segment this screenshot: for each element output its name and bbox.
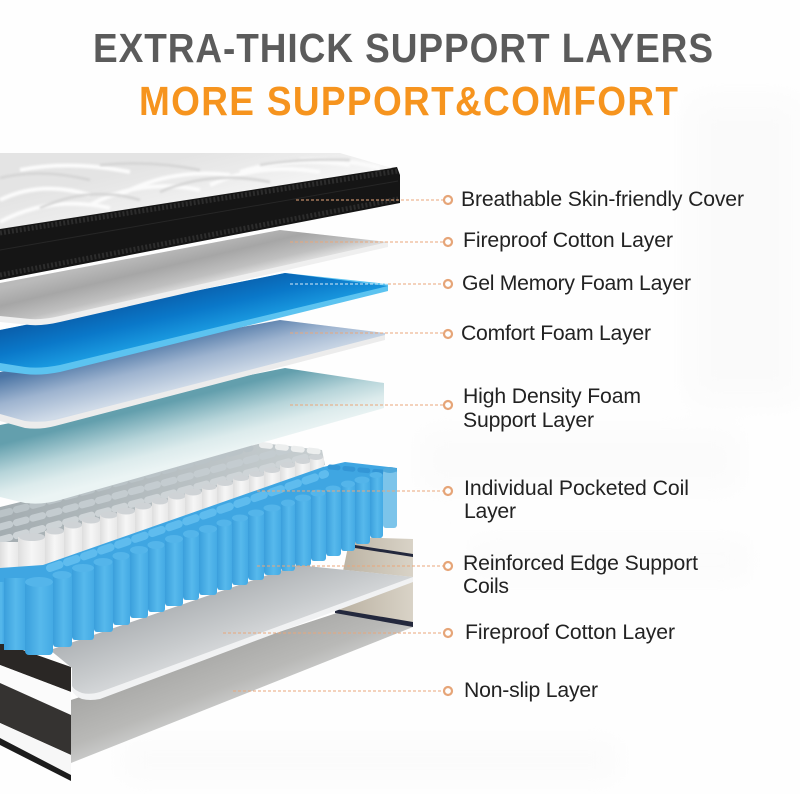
non-slip bottom layer [71,612,413,763]
label: high density foam support layer: Support Layer [463,409,594,432]
label: individual pocketed coil layer [257,477,689,523]
label: reinforced edge support coils: Coils [463,575,509,598]
white coil front row [0,454,324,577]
label: reinforced edge support coils [257,552,698,598]
gel memory foam layer [0,273,388,375]
label: non-slip layer [233,679,598,702]
label: comfort foam layer: Comfort Foam Layer [461,322,651,345]
label: comfort foam layer [290,322,651,345]
blue coil top band [0,462,397,600]
label: fireproof cotton layer upper [290,229,673,252]
label: breathable cover: Breathable Skin-friendly Cover [461,188,744,211]
label: fireproof cotton layer lower: Fireproof Cotton Layer [465,621,675,644]
fireproof cotton upper layer [0,230,388,325]
label: gel memory foam layer [290,272,691,295]
title: EXTRA-THICK SUPPORT LAYERS [93,26,713,71]
label: individual pocketed coil layer: Layer [464,500,516,523]
title: MORE SUPPORT&COMFORT [139,79,678,124]
label: breathable cover [296,188,744,211]
label: fireproof cotton layer lower [223,621,675,644]
comfort foam layer [0,320,385,429]
label: high density foam support layer: High Density Foam [463,385,641,408]
coil back rows [0,443,325,556]
side fabric right [335,537,413,627]
side stripes left [0,642,71,781]
label: individual pocketed coil layer: Individual Pocketed Coil [464,477,689,500]
label: high density foam support layer [290,385,641,432]
title [93,26,713,124]
blue coil front row [0,467,397,655]
label: reinforced edge support coils: Reinforced Edge Support [463,552,698,575]
mattress cross-section [0,153,413,781]
quilted cover [0,153,400,280]
fireproof cotton lower layer [50,565,413,700]
label: gel memory foam layer: Gel Memory Foam Layer [462,272,691,295]
label: non-slip layer: Non-slip Layer [464,679,598,702]
label: fireproof cotton layer upper: Fireproof Cotton Layer [463,229,673,252]
high density foam layer [0,368,384,504]
